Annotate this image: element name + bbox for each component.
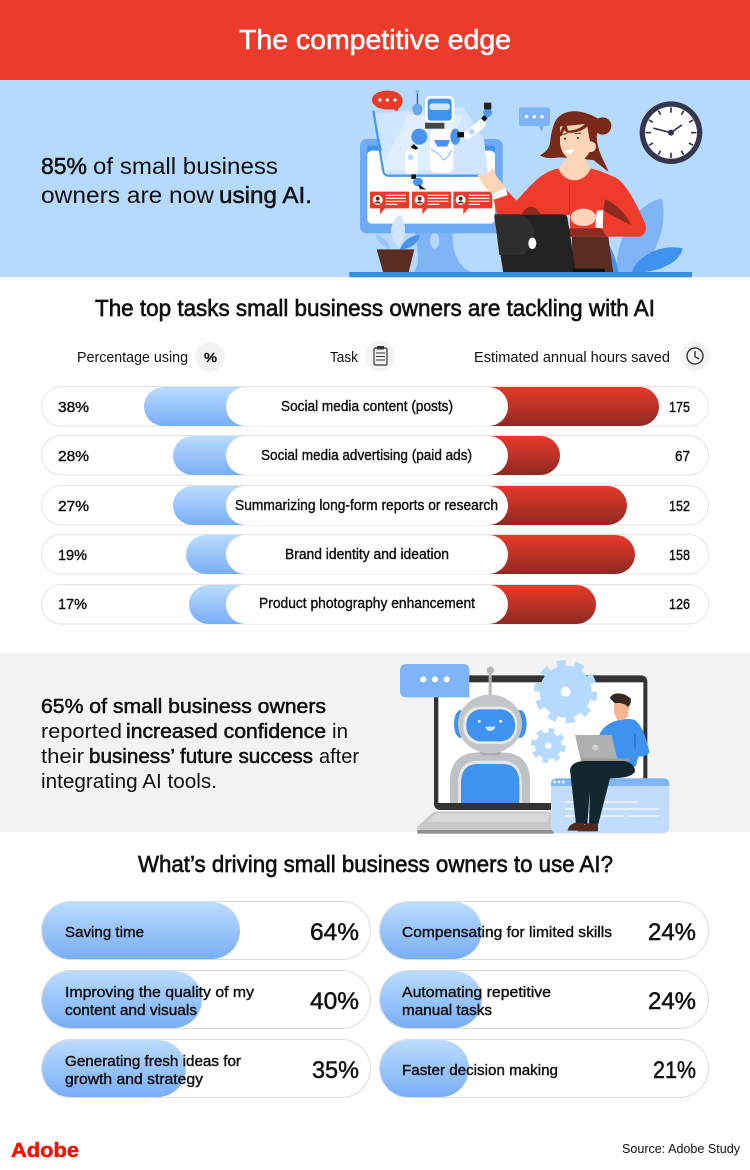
row: summarizing reports: Summarizing long-form reports or research xyxy=(235,498,498,514)
row: brand identity: 158 xyxy=(669,548,690,564)
stat text: 65% confidence: business’ future success xyxy=(89,745,313,768)
panel: task table xyxy=(42,386,708,624)
row: summarizing reports xyxy=(42,486,708,525)
speech bubble xyxy=(400,664,469,697)
pill: fresh ideas xyxy=(42,1040,370,1098)
pill: fresh ideas: growth and strategy xyxy=(65,1072,204,1088)
gears xyxy=(533,663,594,761)
panel: drivers xyxy=(42,902,708,1098)
table column headers xyxy=(77,341,710,372)
pill: improving quality: Improving the quality of my xyxy=(65,985,255,1001)
review cards xyxy=(370,192,492,214)
column header: percentage using xyxy=(77,342,225,372)
stat text: 85% using AI: owners are now xyxy=(41,182,215,208)
pill: automating tasks: Automating repetitive xyxy=(402,985,551,1001)
stat text: 85% using AI: of small business xyxy=(93,153,278,179)
browser window seat xyxy=(551,778,669,833)
column header: task: Task xyxy=(330,350,359,366)
chat bubble xyxy=(519,107,550,132)
wall clock xyxy=(640,101,702,164)
pill: saving time: Saving time xyxy=(65,925,144,941)
row: social media content xyxy=(42,386,708,426)
row: product photography: 17% xyxy=(58,597,87,613)
pill: improving quality xyxy=(42,970,370,1028)
column header: task xyxy=(330,341,395,371)
red speech bubble xyxy=(372,91,403,112)
row: product photography: 126 xyxy=(669,597,690,613)
stat text: 85% using AI: using AI. xyxy=(219,182,312,208)
column header: percentage using: Percentage using xyxy=(77,350,188,366)
pill: improving quality: content and visuals xyxy=(65,1003,197,1019)
stat text: 65% confidence: integrating AI tools. xyxy=(41,770,217,793)
panel: 85% stat hero xyxy=(0,80,750,277)
pill: automating tasks: manual tasks xyxy=(402,1003,492,1019)
stat text: 65% confidence xyxy=(41,695,359,793)
heading: top tasks: The top tasks small business owners are tackling with AI xyxy=(95,295,655,321)
stat text: 65% confidence: their xyxy=(41,745,84,768)
man xyxy=(568,693,649,831)
pill: limited skills: 24% xyxy=(648,919,696,946)
pill: limited skills xyxy=(380,902,708,960)
pill: faster decisions xyxy=(380,1040,708,1098)
pill: automating tasks xyxy=(380,970,708,1028)
title banner xyxy=(0,0,750,80)
stat text: 65% confidence: 65% of small business owners xyxy=(41,695,326,718)
stat text: 65% confidence: increased confidence xyxy=(126,720,326,743)
row: brand identity xyxy=(42,534,708,574)
pill: faster decisions: 21% xyxy=(653,1057,696,1084)
pill: faster decisions: Faster decision making xyxy=(402,1063,558,1079)
stat text: 85% using AI xyxy=(41,153,312,208)
woman xyxy=(477,111,646,273)
column header: hours saved: Estimated annual hours saved xyxy=(474,350,670,366)
row: brand identity: Brand identity and ideation xyxy=(285,547,449,563)
illustration: man with laptop and robot xyxy=(400,660,670,834)
source note: Source: Adobe Study xyxy=(622,1142,741,1156)
row: summarizing reports: 27% xyxy=(58,499,89,515)
row: social media advertising: 28% xyxy=(58,449,89,465)
column header: hours saved xyxy=(474,341,710,371)
desk xyxy=(349,272,692,277)
laptop xyxy=(494,214,605,273)
pill: limited skills: Compensating for limited skills xyxy=(402,925,612,941)
row: social media content: 175 xyxy=(669,400,690,416)
pill: improving quality: 40% xyxy=(310,988,359,1015)
row: social media advertising xyxy=(42,436,708,475)
stat text: 65% confidence: after xyxy=(319,745,359,768)
stat text: 85% using AI: 85% xyxy=(41,153,87,179)
title banner: The competitive edge xyxy=(239,24,511,55)
row: social media content: Social media content (posts) xyxy=(281,399,453,415)
robot xyxy=(450,667,530,803)
pill: fresh ideas: Generating fresh ideas for xyxy=(65,1054,241,1070)
row: summarizing reports: 152 xyxy=(669,499,690,515)
row: product photography xyxy=(42,584,708,624)
pill: saving time: 64% xyxy=(310,919,359,946)
plants right xyxy=(603,198,683,273)
row: social media advertising: 67 xyxy=(675,449,690,465)
row: product photography: Product photography enhancement xyxy=(259,596,475,612)
stat text: 65% confidence: in xyxy=(332,720,348,743)
column header: percentage using: % xyxy=(204,350,217,365)
illustration: woman working with AI robot xyxy=(349,90,702,278)
logo: Adobe: Adobe xyxy=(11,1139,79,1162)
pill: saving time xyxy=(42,902,370,960)
potted plant xyxy=(376,214,420,273)
row: brand identity: 19% xyxy=(58,548,87,564)
row: social media advertising: Social media advertising (paid ads) xyxy=(261,448,472,464)
pill: automating tasks: 24% xyxy=(648,988,696,1015)
pill: fresh ideas: 35% xyxy=(312,1057,359,1084)
row: social media content: 38% xyxy=(58,400,89,416)
panel: 65% confidence stat xyxy=(0,653,750,834)
heading: what's driving: What’s driving small business owners to use AI? xyxy=(138,851,613,877)
stat text: 65% confidence: reported xyxy=(41,720,122,743)
